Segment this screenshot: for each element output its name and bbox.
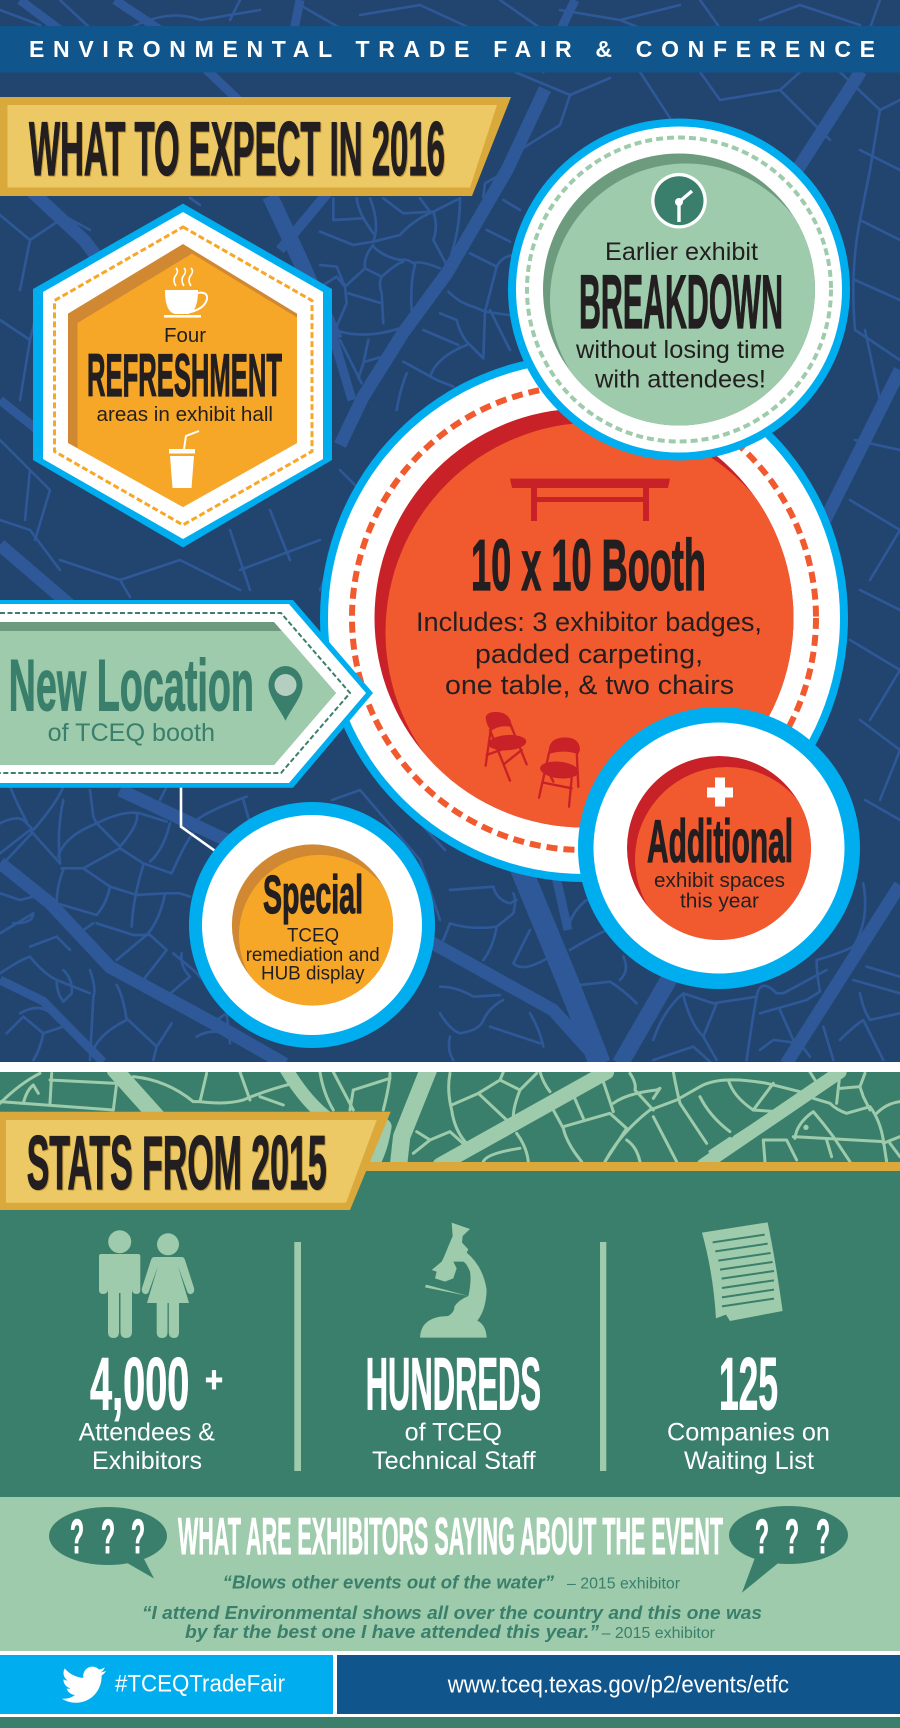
panel: new location arrow (0, 600, 373, 788)
quote: best show: – 2015 exhibitor (602, 1625, 715, 1642)
stat: attendees and exhibitors: 4,000 (90, 1342, 189, 1425)
divider band (0, 1062, 900, 1072)
stat: technical staff (366, 1342, 541, 1475)
panel: website url: www.tceq.texas.gov/p2/events/etfc (447, 1672, 789, 1698)
icon: table (510, 479, 670, 521)
background: green leaf veins (0, 1070, 900, 1167)
panel: additional exhibit spaces circle (578, 707, 860, 989)
stat: companies on waiting list (667, 1342, 830, 1475)
quote: best show: “I attend Environmental shows all over the country and this one was (142, 1602, 762, 1623)
icon: left speech bubble (49, 1507, 167, 1578)
icon: coffee cup (164, 268, 207, 318)
text: hashtag: #TCEQTradeFair (115, 1671, 285, 1698)
quote: best show: by far the best one I have attended this year.” (185, 1621, 600, 1642)
icon: right speech bubble: ? (755, 1511, 769, 1564)
icon: drink with straw (169, 431, 199, 488)
icon: map pin (268, 666, 302, 721)
icon: microscope (420, 1223, 487, 1338)
stat: technical staff: Technical Staff (372, 1447, 536, 1475)
text: booth includes: one table, & two chairs (445, 670, 734, 700)
text: exhibit spaces this year (654, 870, 785, 912)
panel: refreshment hexagon: REFRESHMENT (87, 342, 282, 409)
title: stats from 2015: STATS FROM 2015 (27, 1121, 327, 1206)
text: TCEQ remediation and HUB display (246, 926, 380, 984)
text: areas in exhibit hall: areas in exhibit hall (96, 404, 273, 426)
text: booth includes: Includes: 3 exhibitor badges, (416, 607, 762, 637)
stat: attendees and exhibitors (79, 1342, 223, 1475)
icon: right speech bubble: ? (785, 1511, 799, 1564)
text: without losing time (575, 336, 785, 394)
top banner: event name (0, 26, 900, 72)
quote: blows other events: “Blows other events out of the water” (223, 1571, 555, 1592)
panel: refreshment hexagon (33, 204, 332, 548)
text: of TCEQ booth: of TCEQ booth (48, 719, 215, 747)
divider (600, 1242, 606, 1471)
text: TCEQ remediation and HUB display: HUB display (261, 964, 365, 984)
quote: blows other events: – 2015 exhibitor (567, 1575, 680, 1592)
icon: man and woman (99, 1230, 194, 1338)
text: without losing time: without losing time (575, 336, 785, 364)
text: without losing time: with attendees! (594, 366, 766, 394)
text: booth includes: padded carpeting, (475, 639, 703, 669)
footer strip background (0, 1651, 900, 1717)
icon: plus (707, 778, 733, 806)
heading: special: Special (263, 865, 363, 925)
title: stats from 2015 (0, 1112, 391, 1210)
stat: companies on waiting list: Companies on (667, 1418, 830, 1446)
icon: right speech bubble (729, 1506, 848, 1593)
stat: attendees and exhibitors: Exhibitors (92, 1447, 202, 1475)
text: HUNDREDS (366, 1342, 541, 1425)
title: what to expect in 2016 (0, 97, 511, 196)
text: exhibit spaces this year: this year (680, 890, 759, 912)
stat: companies on waiting list: Waiting List (684, 1447, 814, 1475)
icon: twitter bird (62, 1667, 106, 1703)
panel: special display circle (189, 802, 435, 1048)
panel: stats background (0, 1162, 900, 1497)
icon: left speech bubble: ? (131, 1511, 145, 1564)
panel: website url (337, 1655, 900, 1714)
heading: new location: New Location (9, 646, 254, 727)
icon: folding chairs (486, 712, 580, 807)
stat: attendees and exhibitors: Attendees & (79, 1418, 215, 1446)
text: TCEQ remediation and HUB display: TCEQ (287, 926, 339, 947)
text: TCEQ remediation and HUB display: remediation and (246, 945, 380, 966)
icon: clock (651, 173, 707, 228)
quote: best show (142, 1602, 762, 1642)
text: earlier exhibit: Earlier exhibit (605, 238, 758, 266)
connector line (181, 782, 225, 858)
divider (294, 1242, 301, 1471)
icon: paper list (702, 1222, 783, 1321)
icon: right speech bubble: ? (816, 1511, 830, 1564)
text: four: Four (164, 325, 206, 347)
icon: left speech bubble: ? (101, 1511, 115, 1564)
panel: twitter hashtag (0, 1655, 333, 1714)
icon: left speech bubble: ? (70, 1511, 84, 1564)
background: blue leaf veins (0, 0, 900, 1064)
panel: 10 x 10 booth circle (320, 354, 848, 882)
text: exhibit spaces this year: exhibit spaces (654, 870, 785, 892)
bottom green strip (0, 1717, 900, 1728)
panel: exhibitor quotes (0, 1497, 900, 1651)
stat: companies on waiting list: 125 (719, 1342, 778, 1425)
text: booth includes (416, 607, 762, 700)
panel: earlier exhibit breakdown circle (508, 118, 850, 460)
top banner: event name: ENVIRONMENTAL TRADE FAIR & CONFERENCE (29, 36, 875, 62)
stat: attendees and exhibitors: + (205, 1359, 223, 1400)
stat: technical staff: of TCEQ (405, 1418, 502, 1446)
